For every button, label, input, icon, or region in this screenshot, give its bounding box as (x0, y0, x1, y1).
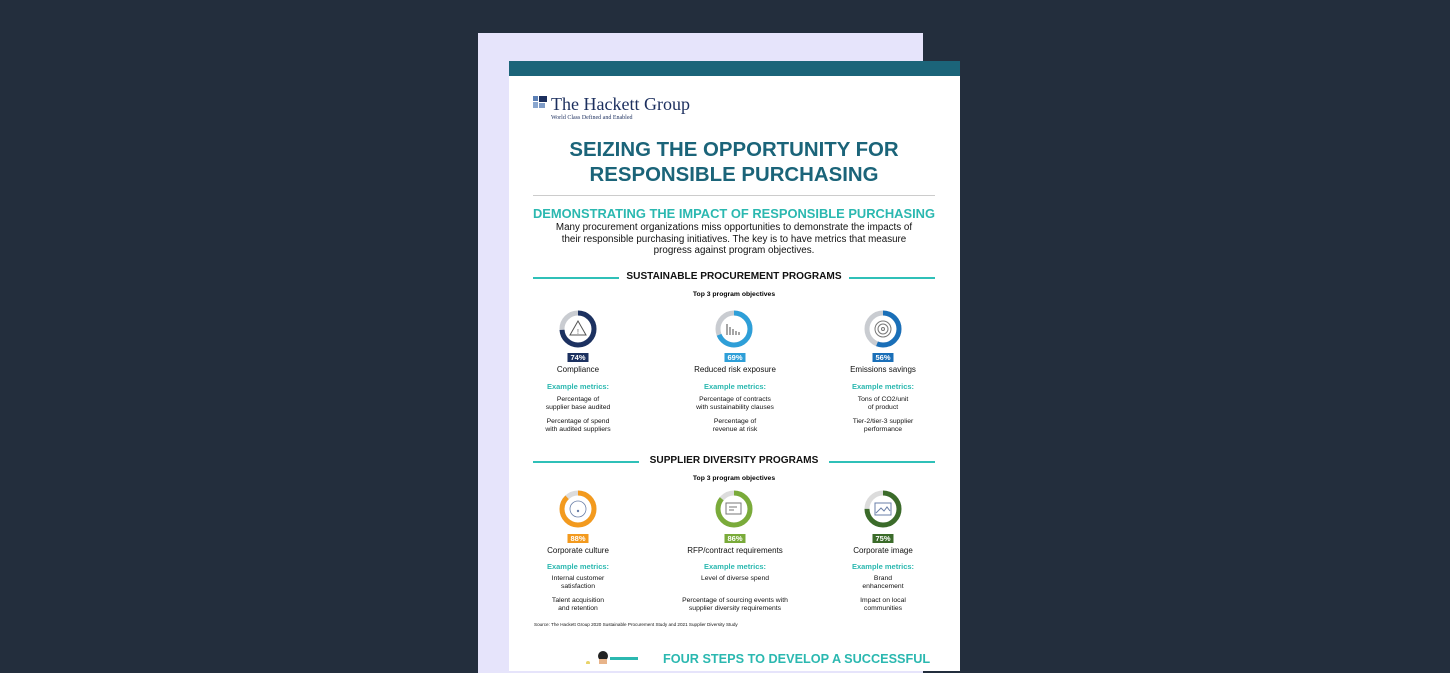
column: image: 75% (875, 534, 891, 543)
column: rfp: Example metrics: (704, 562, 766, 571)
donut: culture 88% (560, 490, 596, 528)
column: risk: with sustainability clauses (696, 404, 774, 411)
column: image (852, 534, 914, 612)
column: image: Impact on local (860, 597, 906, 604)
column: culture (547, 534, 609, 612)
front sheet (509, 61, 960, 671)
intro text (556, 222, 912, 256)
intro text: progress against program objectives. (654, 245, 814, 256)
title (569, 139, 899, 186)
illustration: person with telescope (586, 651, 638, 664)
column: rfp: supplier diversity requirements (689, 605, 781, 612)
section heading: diversity: SUPPLIER DIVERSITY PROGRAMS (650, 455, 818, 466)
column: emissions (850, 353, 916, 433)
column: emissions: of product (868, 404, 898, 411)
icon: logo squares (533, 96, 547, 108)
column: risk: Percentage of (714, 418, 756, 425)
column: image: communities (864, 605, 902, 612)
column: risk: Percentage of contracts (699, 396, 771, 403)
text: Top 3 program objectives (693, 291, 775, 298)
title: RESPONSIBLE PURCHASING (590, 164, 878, 186)
column: rfp: Percentage of sourcing events with (682, 597, 788, 604)
column: risk: Example metrics: (704, 382, 766, 391)
column: compliance: Example metrics: (547, 382, 609, 391)
column: risk: 69% (727, 353, 743, 362)
donut: rfp 86% (716, 490, 752, 528)
logo: The Hackett Group (551, 94, 690, 114)
column: emissions: Tier-2/tier-3 supplier (853, 418, 913, 425)
column: rfp: 86% (727, 534, 743, 543)
column: image: Brand (874, 575, 892, 582)
donut: risk 69% (716, 310, 752, 348)
column: compliance: with audited suppliers (545, 426, 611, 433)
column: emissions: performance (864, 426, 902, 433)
column: culture: Example metrics: (547, 562, 609, 571)
column: rfp: RFP/contract requirements (687, 546, 783, 555)
column: culture: 88% (570, 534, 586, 543)
column: emissions: Tons of CO2/unit (858, 396, 908, 403)
intro text: their responsible purchasing initiatives. The key is to have metrics that measure (562, 234, 906, 244)
subheading: DEMONSTRATING THE IMPACT OF RESPONSIBLE PURCHASING (533, 206, 935, 221)
column: culture: Corporate culture (547, 546, 609, 555)
donut: image 75% (864, 490, 902, 528)
column: rfp: Level of diverse spend (701, 575, 769, 582)
column: compliance: Compliance (557, 365, 599, 374)
column: rfp (682, 534, 788, 612)
column: culture: and retention (558, 605, 598, 612)
section heading: sustainable: SUSTAINABLE PROCUREMENT PROGRAMS (626, 271, 842, 282)
column: emissions: 56% (875, 353, 891, 362)
column: compliance: supplier base audited (546, 404, 610, 411)
column: image: Example metrics: (852, 562, 914, 571)
column: image: enhancement (862, 583, 904, 590)
donut: emissions 56% (864, 310, 902, 348)
source note: Source: The Hackett Group 2020 Sustainable Procurement Study and 2021 Supplier Diversity Study (534, 622, 738, 627)
column: image: Corporate image (853, 546, 913, 555)
column: compliance (545, 353, 611, 433)
logo: World Class Defined and Enabled (551, 115, 632, 121)
donut: compliance 74%: ! (577, 329, 579, 336)
column: emissions: Emissions savings (850, 365, 916, 374)
column: compliance: Percentage of (557, 396, 599, 403)
back sheet (478, 33, 923, 673)
column: culture: satisfaction (561, 583, 595, 590)
column: emissions: Example metrics: (852, 382, 914, 391)
column: compliance: Percentage of spend (547, 418, 609, 425)
column: culture: Talent acquisition (552, 597, 604, 604)
title: SEIZING THE OPPORTUNITY FOR (569, 139, 899, 161)
column: risk (694, 353, 776, 433)
column: culture: Internal customer (552, 575, 604, 582)
column: risk: revenue at risk (713, 426, 757, 433)
bottom heading: FOUR STEPS TO DEVELOP A SUCCESSFUL (663, 652, 930, 666)
logo (533, 94, 690, 121)
top bar (509, 61, 960, 76)
text: Top 3 program objectives (693, 475, 775, 482)
column: risk: Reduced risk exposure (694, 365, 776, 374)
column: compliance: 74% (570, 353, 586, 362)
donut: compliance 74% (560, 310, 596, 348)
intro text: Many procurement organizations miss opportunities to demonstrate the impacts of (556, 222, 912, 233)
